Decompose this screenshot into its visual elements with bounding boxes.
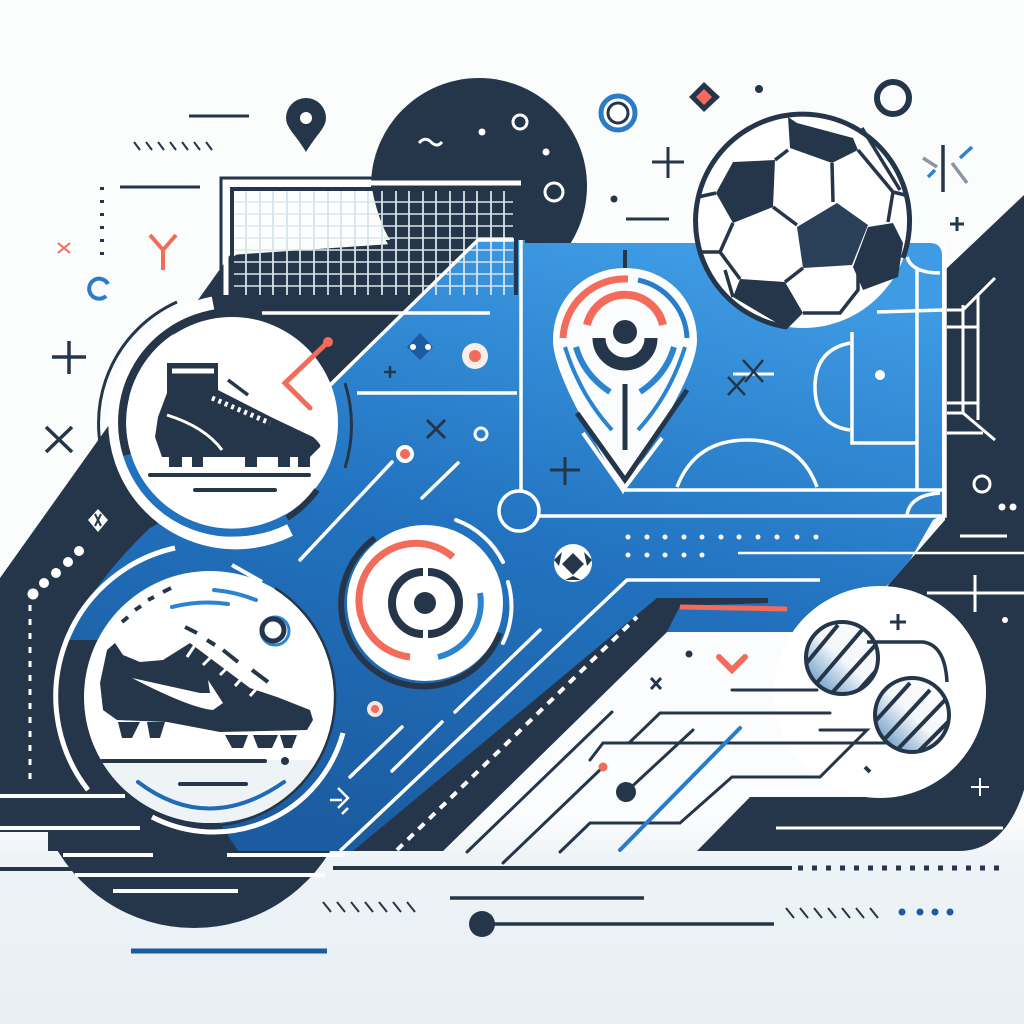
pitch lines <box>262 240 945 851</box>
navy left band <box>0 238 480 851</box>
glasses striped lenses <box>805 622 955 760</box>
goal right <box>947 278 995 440</box>
glasses circle panel <box>774 586 986 798</box>
coral bar <box>680 607 787 609</box>
navy right band <box>697 195 1024 851</box>
marks on dark circle <box>419 115 563 201</box>
dotted rows <box>626 534 1024 558</box>
circle: boot 1 <box>99 302 351 543</box>
dark circle backdrop <box>371 78 587 294</box>
bottom lines <box>0 868 1000 951</box>
blue pitch <box>65 240 942 851</box>
right side marks <box>651 476 1024 828</box>
goal <box>221 178 525 295</box>
dashed diagonal <box>397 617 637 850</box>
goal net backing <box>232 189 390 258</box>
white horizontal stripes bottom left <box>0 796 345 891</box>
circle: boot 2 <box>56 548 343 832</box>
top icons <box>46 82 972 452</box>
node dots <box>598 730 693 802</box>
soccer ball <box>696 114 910 329</box>
small ball <box>554 544 592 582</box>
target centre <box>341 520 511 686</box>
navy diagonal band <box>353 598 768 851</box>
heart chevron <box>719 657 745 670</box>
navy bottom half circle <box>48 832 340 928</box>
speed lines bottom right <box>467 690 887 863</box>
blue diagonal line <box>620 728 740 850</box>
pitch centre dots <box>875 370 885 380</box>
node and small marks <box>330 333 488 814</box>
pitch marks <box>384 360 774 485</box>
left dark band marks <box>28 509 108 785</box>
target pin <box>555 250 695 490</box>
